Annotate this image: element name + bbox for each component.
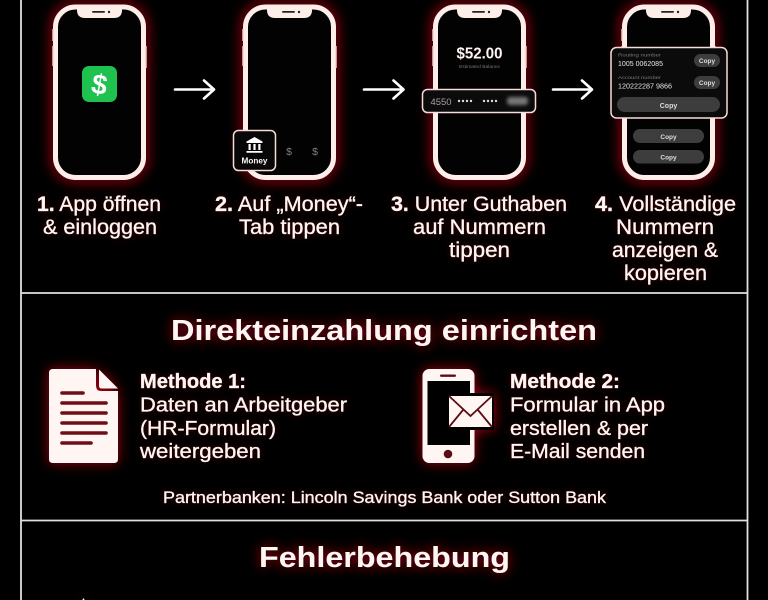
icon: envelope — [447, 393, 494, 430]
arrow 3 — [553, 80, 592, 98]
step 1 caption: 1. App öffnen — [37, 193, 161, 216]
tab icons: dollar signs: $ — [286, 146, 292, 158]
icon: Cash App logo: $ — [89, 68, 110, 101]
arrow 1 — [175, 80, 214, 98]
method 2 text: erstellen & per — [510, 418, 648, 440]
heading: troubleshooting: Fehlerbehebung — [259, 542, 510, 574]
method 2 text: Formular in App — [510, 394, 665, 416]
arrow 2 — [364, 80, 404, 98]
callout: routing and account numbers: 1005 0062085 — [618, 61, 663, 68]
step 1: phone with Cash App icon — [52, 7, 147, 178]
step 3 caption: tippen — [449, 239, 510, 262]
method 1 text — [139, 371, 347, 463]
method 2 text — [510, 371, 665, 463]
method 1 text: weitergeben — [139, 441, 261, 463]
partner banks note: Partnerbanken: Lincoln Savings Bank oder Sutton Bank — [163, 489, 607, 507]
method 1 text: Daten an Arbeitgeber — [140, 394, 347, 416]
step 4 caption: kopieren — [624, 262, 707, 285]
step 4 caption: anzeigen & — [612, 239, 718, 262]
callout: routing and account numbers — [611, 48, 727, 118]
copy button: Copy — [660, 134, 677, 141]
icon: bank — [246, 137, 262, 153]
icon: document — [49, 369, 118, 463]
copy button: Copy — [660, 154, 677, 162]
callout: routing and account numbers: Copy — [699, 80, 716, 87]
method 1 text: (HR-Formular) — [140, 418, 276, 440]
method 2 text: Methode 2: — [510, 371, 620, 393]
step 2: phone with Money tab — [234, 7, 337, 178]
step 4 caption — [595, 193, 736, 285]
tab icons: dollar signs: $ — [312, 146, 318, 158]
step 1 caption: & einloggen — [43, 216, 157, 239]
callout: routing and account numbers: Routing number — [618, 52, 661, 58]
callout: Money tab: Money — [242, 156, 268, 166]
step 3 caption — [391, 193, 567, 262]
step 4 caption: 4. Vollständige — [595, 193, 736, 216]
step 3 caption: 3. Unter Guthaben — [391, 193, 567, 216]
copy button — [633, 150, 704, 164]
method 2 text: E-Mail senden — [510, 441, 645, 463]
step 2 caption: 2. Auf „Money“- — [215, 193, 363, 216]
callout: routing and account numbers: Copy — [699, 58, 716, 65]
callout: routing and account numbers: 120222287 9866 — [618, 84, 672, 90]
icon: phone with envelope — [422, 369, 494, 463]
step 3 caption: auf Nummern — [413, 216, 546, 239]
callout: routing and account numbers: Account number — [618, 75, 661, 81]
step 2 caption — [215, 193, 363, 239]
callout: card number: 4550 — [430, 97, 452, 108]
callout: card number — [422, 90, 536, 112]
method 1 text: Methode 1: — [140, 371, 246, 393]
step 4 caption: Nummern — [616, 216, 714, 239]
step 2 caption: Tab tippen — [239, 216, 340, 239]
callout: routing and account numbers: Copy — [660, 103, 677, 110]
balance label: Estimated Balance — [459, 64, 500, 70]
step 4: phone with copy buttons — [621, 7, 716, 178]
copy button — [633, 129, 704, 143]
icon: Cash App logo — [82, 66, 117, 102]
step 1 caption — [37, 193, 161, 239]
icon: warning triangle tip — [80, 598, 87, 600]
callout: Money tab — [234, 130, 276, 170]
step 3: phone with balance — [432, 7, 527, 178]
balance amount: $52.00 — [456, 46, 502, 62]
heading: direct deposit: Direkteinzahlung einrichten — [171, 315, 597, 347]
tab icons: dollar signs — [286, 146, 318, 158]
